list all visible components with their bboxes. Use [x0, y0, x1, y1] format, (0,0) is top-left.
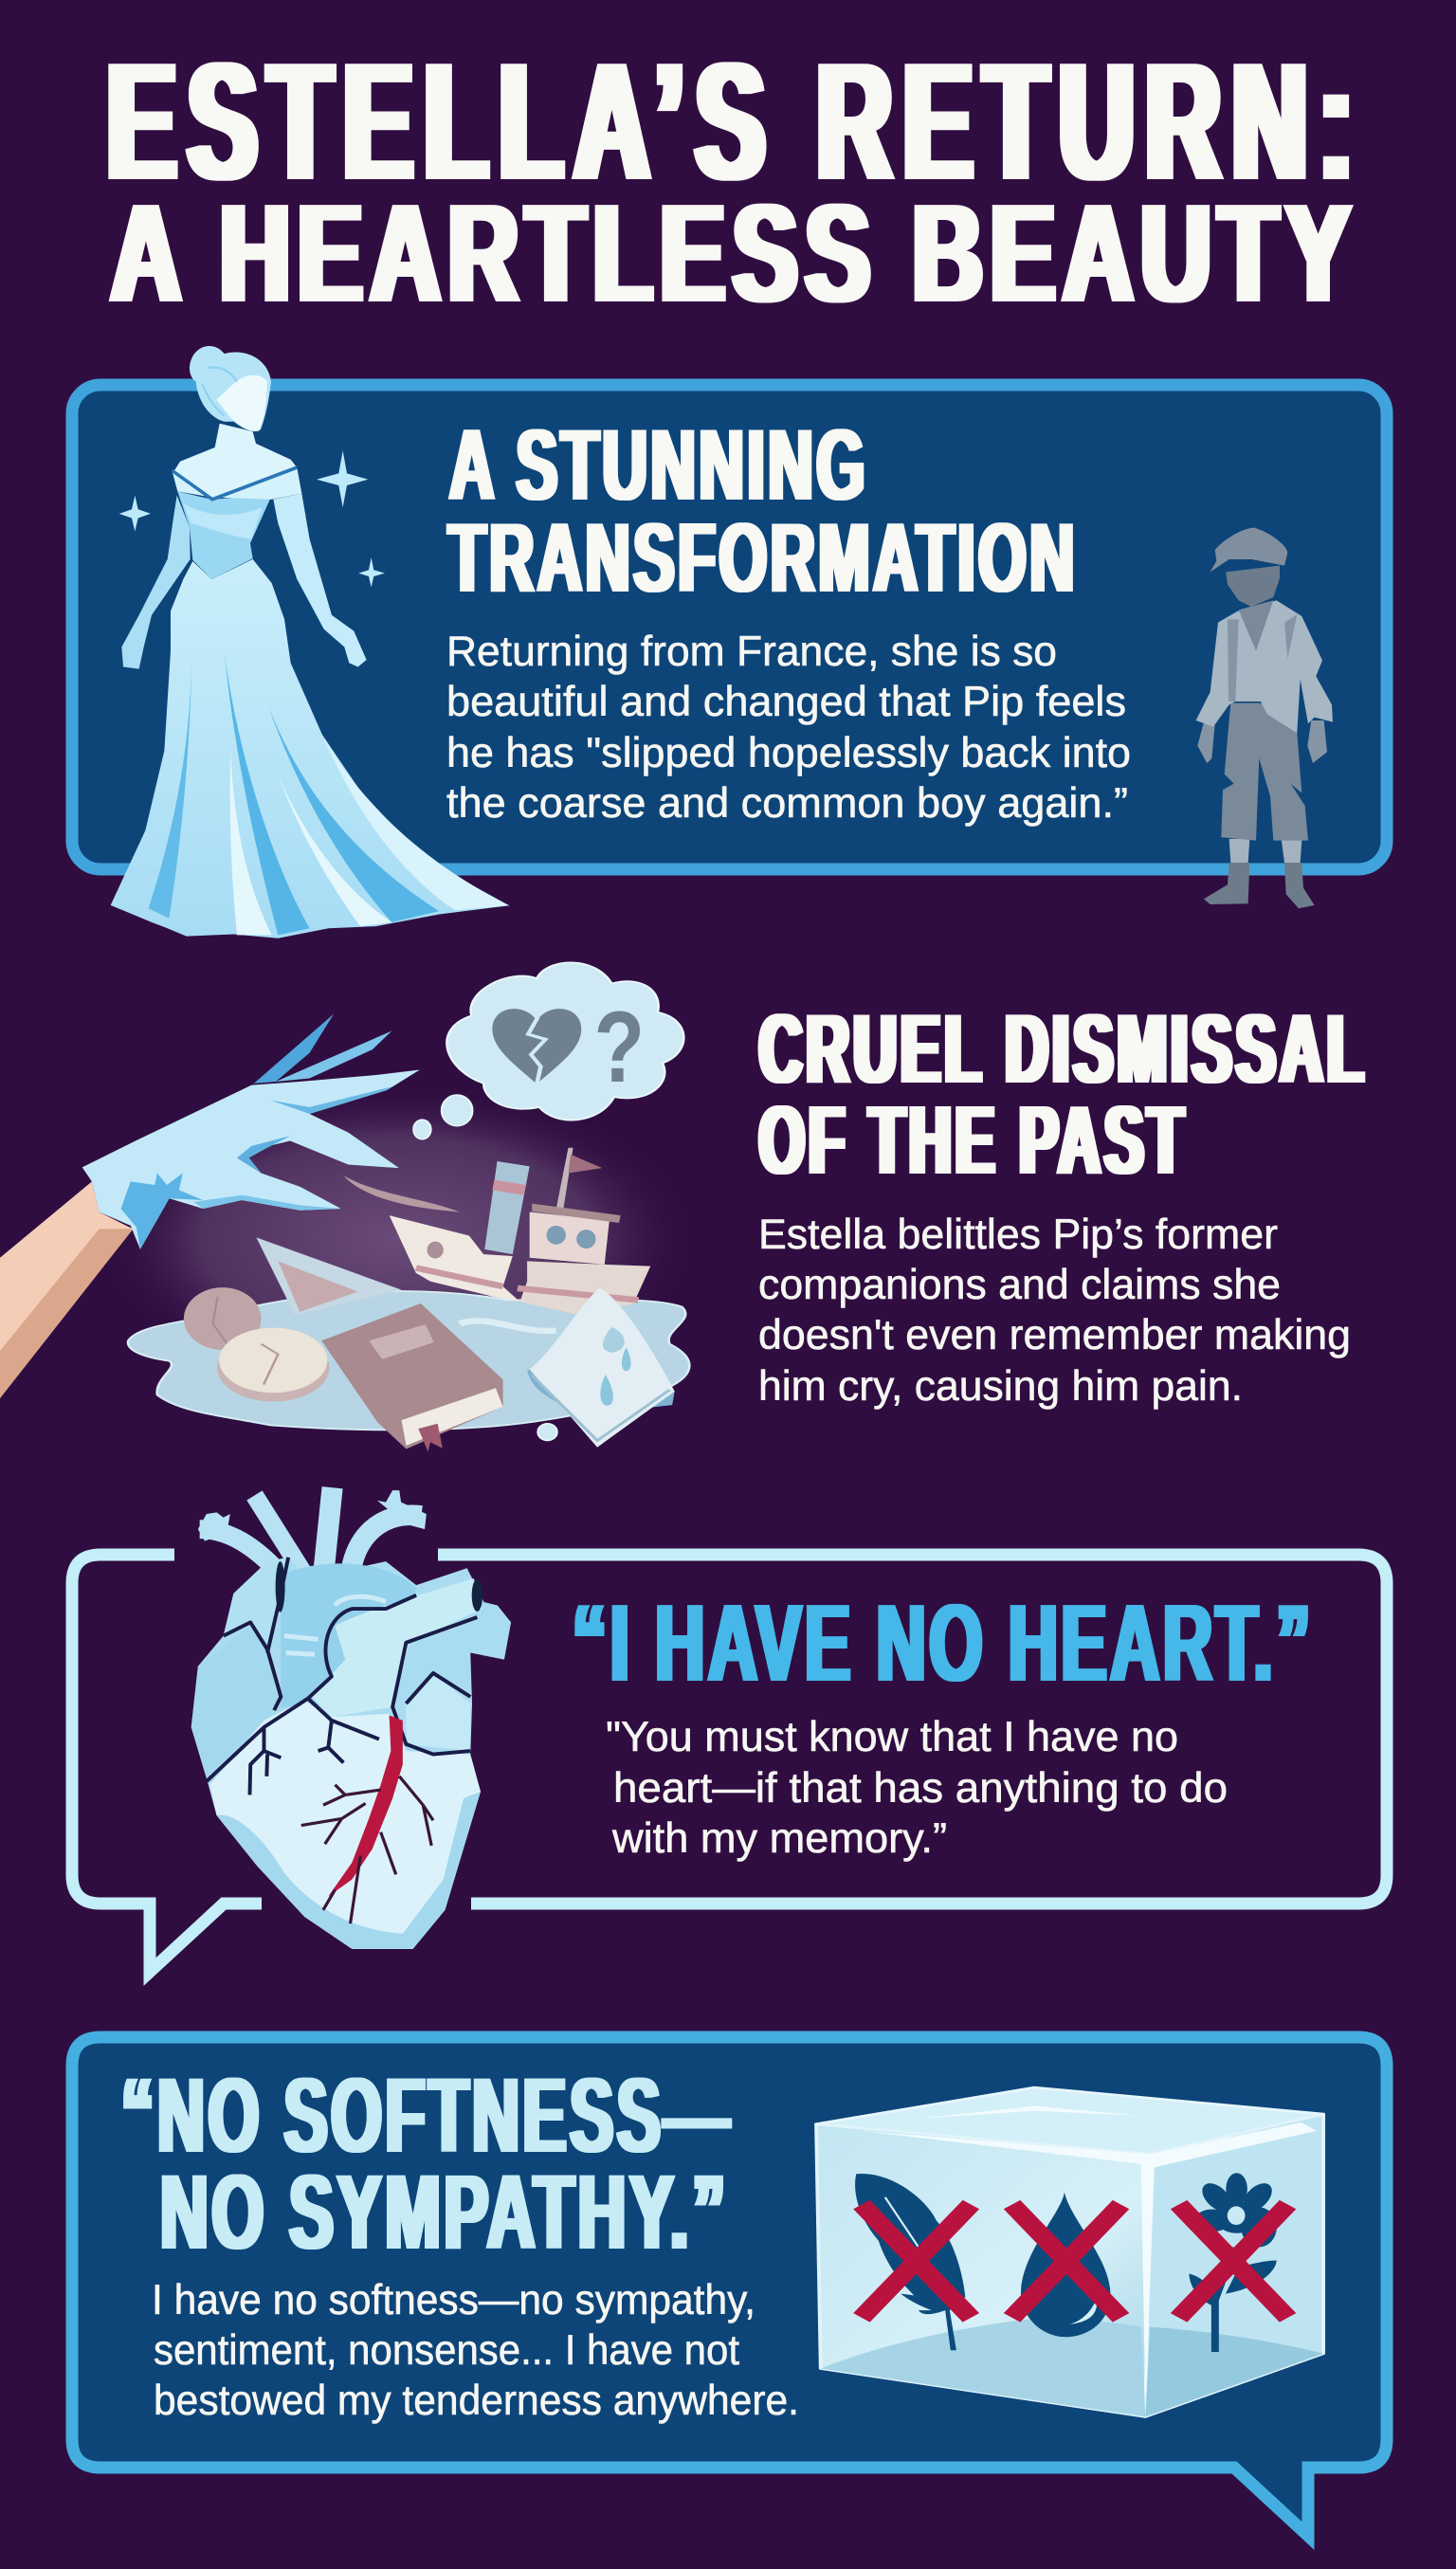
left arm [121, 496, 191, 669]
title [107, 27, 1365, 332]
panel: I have no heart [72, 1487, 1387, 1972]
thought cloud with broken heart: ? [594, 990, 645, 1103]
flower [1189, 2173, 1278, 2352]
toy ship [343, 1148, 650, 1315]
red crosses [862, 2205, 1288, 2318]
heart silhouette [191, 1558, 511, 1949]
panel 3 body text [606, 1714, 1228, 1862]
panel: a stunning transformation [72, 346, 1387, 938]
panel 1 body text: Returning from France, she is so [446, 629, 1057, 675]
panel 1 frame [72, 385, 1387, 869]
panel 1 body text: he has "slipped hopelessly back into [446, 730, 1131, 776]
gown skirt [111, 559, 509, 938]
panel 4 body text: bestowed my tenderness anywhere. [154, 2378, 799, 2424]
section 2 body text: Estella belittles Pip’s former [758, 1212, 1278, 1258]
icon: faded boy Pip [1196, 528, 1333, 908]
handkerchief [527, 1288, 675, 1448]
section 2 heading [759, 994, 1368, 1194]
panel: no softness no sympathy [72, 2037, 1387, 2536]
panel 1 body text: beautiful and changed that Pip feels [446, 679, 1126, 725]
panel 4 body text: sentiment, nonsense... I have not [154, 2327, 740, 2374]
panel 1 heading [448, 408, 1078, 613]
water drop [1021, 2193, 1110, 2337]
icon: ice gown Estella [111, 346, 509, 938]
panel 4 body text: I have no softness—no sympathy, [152, 2277, 755, 2323]
panel 3 body text: "You must know that I have no [606, 1714, 1178, 1760]
puddle [128, 1291, 689, 1430]
panel 1 body text: the coarse and common boy again.” [446, 780, 1128, 827]
neck and shoulders [173, 424, 297, 500]
panel 1 body text [446, 629, 1131, 827]
thought bubbles [413, 1095, 557, 1441]
icon: frozen cracked heart [191, 1487, 511, 1949]
panel 4 heading: NO SYMPATHY.” [160, 2153, 729, 2271]
hair and face [190, 346, 271, 431]
panel 3 body text: with my memory.” [611, 1815, 947, 1862]
set square [256, 1237, 401, 1315]
illustration: hand dismissing memories [0, 962, 697, 1451]
book [321, 1303, 503, 1451]
feather [855, 2174, 965, 2350]
section 2 body text: him cry, causing him pain. [758, 1363, 1243, 1410]
panel 4 heading [121, 2056, 733, 2271]
panel 4 body text [152, 2277, 799, 2424]
section: cruel dismissal of the past [0, 962, 1368, 1451]
rocks [184, 1287, 329, 1402]
speech bubble frame [72, 2037, 1387, 2536]
icy hand [82, 1014, 420, 1249]
thought cloud with broken heart [446, 962, 683, 1121]
panel 3 body text: heart—if that has anything to do [613, 1765, 1228, 1812]
icon: sparkles [119, 450, 385, 587]
panel 1 heading: A STUNNING [449, 408, 868, 521]
section 2 body text [758, 1212, 1351, 1410]
panel 1 heading: TRANSFORMATION [448, 503, 1078, 613]
panel 4 heading: “NO SOFTNESS— [121, 2056, 733, 2175]
right arm [273, 493, 367, 667]
section 2 body text: companions and claims she [758, 1262, 1281, 1308]
arm [0, 1181, 133, 1398]
icon: ice cube with crossed-out symbols [816, 2087, 1323, 2416]
bodice [177, 491, 272, 579]
speech bubble outline [72, 1555, 1387, 1972]
section 2 body text: doesn't even remember making [758, 1312, 1351, 1358]
